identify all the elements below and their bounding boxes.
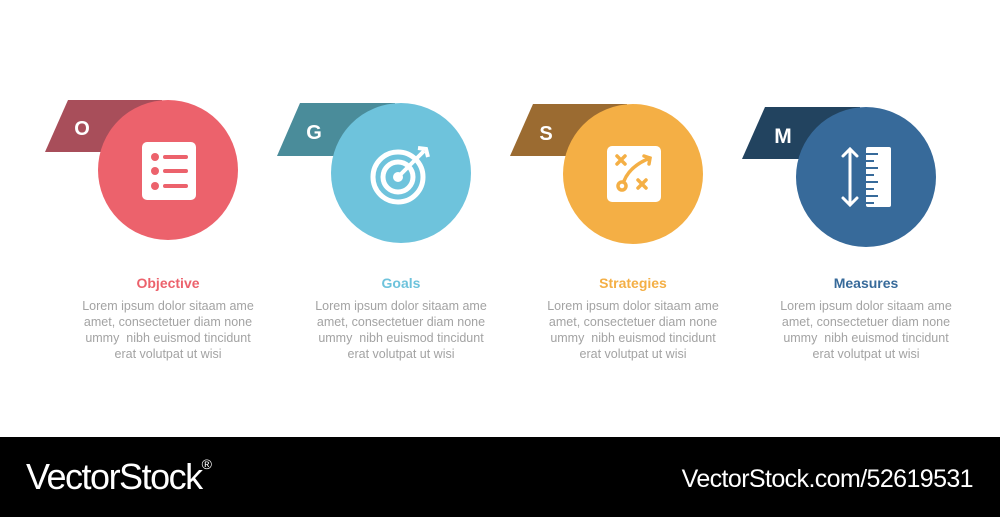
footer bar — [0, 437, 1000, 517]
tab: S — [510, 104, 627, 156]
text: measures body: Lorem ipsum dolor sitaam ame — [780, 299, 952, 313]
tab: G: G — [306, 122, 322, 144]
step: measures — [742, 107, 936, 247]
title: Objective: Objective — [136, 275, 200, 291]
step: objective — [45, 100, 238, 240]
title: Strategies: Strategies — [599, 275, 667, 291]
text: goals body: Lorem ipsum dolor sitaam ame — [315, 299, 487, 313]
text: strategies body — [547, 299, 719, 361]
text: objective body: erat volutpat ut wisi — [114, 347, 222, 361]
footer: brand: VectorStock® — [26, 456, 210, 497]
text: goals body: erat volutpat ut wisi — [348, 347, 454, 361]
tab: S: S — [539, 123, 553, 145]
title: Measures: Measures — [834, 275, 898, 291]
circle: goals — [331, 103, 471, 243]
text: goals body: amet, consectetuer diam none — [317, 315, 485, 329]
text: strategies body: erat volutpat ut wisi — [580, 347, 686, 361]
text: objective body — [82, 299, 254, 361]
circle: measures — [796, 107, 936, 247]
icon: strategy board — [607, 146, 661, 202]
text: objective body: Lorem ipsum dolor sitaam ame — [82, 299, 254, 313]
text: measures body: amet, consectetuer diam none — [782, 315, 950, 329]
text: strategies body: amet, consectetuer diam none — [549, 315, 717, 329]
step: goals — [277, 103, 471, 243]
text: goals body: ummy nibh euismod tincidunt — [318, 331, 484, 345]
title: Goals: Goals — [382, 275, 420, 291]
tab: G — [277, 103, 395, 156]
footer: url: VectorStock.com/52619531 — [682, 465, 973, 493]
text: strategies body: ummy nibh euismod tincidunt — [550, 331, 716, 345]
text: strategies body: Lorem ipsum dolor sitaam ame — [547, 299, 719, 313]
icon: list — [142, 142, 196, 200]
circle: strategies — [563, 104, 703, 244]
text: measures body — [780, 299, 952, 361]
text: goals body — [315, 299, 487, 361]
text: measures body: erat volutpat ut wisi — [812, 347, 920, 361]
tab: O: O — [74, 118, 90, 140]
text: objective body: ummy nibh euismod tincidunt — [85, 331, 251, 345]
tab: M — [742, 107, 860, 159]
text: objective body: amet, consectetuer diam none — [84, 315, 252, 329]
tab: M: M — [774, 125, 792, 148]
icon: target — [373, 148, 428, 202]
icon: ruler — [843, 147, 891, 207]
text: measures body: ummy nibh euismod tincidunt — [783, 331, 949, 345]
step: strategies — [510, 104, 703, 244]
circle: objective — [98, 100, 238, 240]
tab: O — [45, 100, 162, 152]
